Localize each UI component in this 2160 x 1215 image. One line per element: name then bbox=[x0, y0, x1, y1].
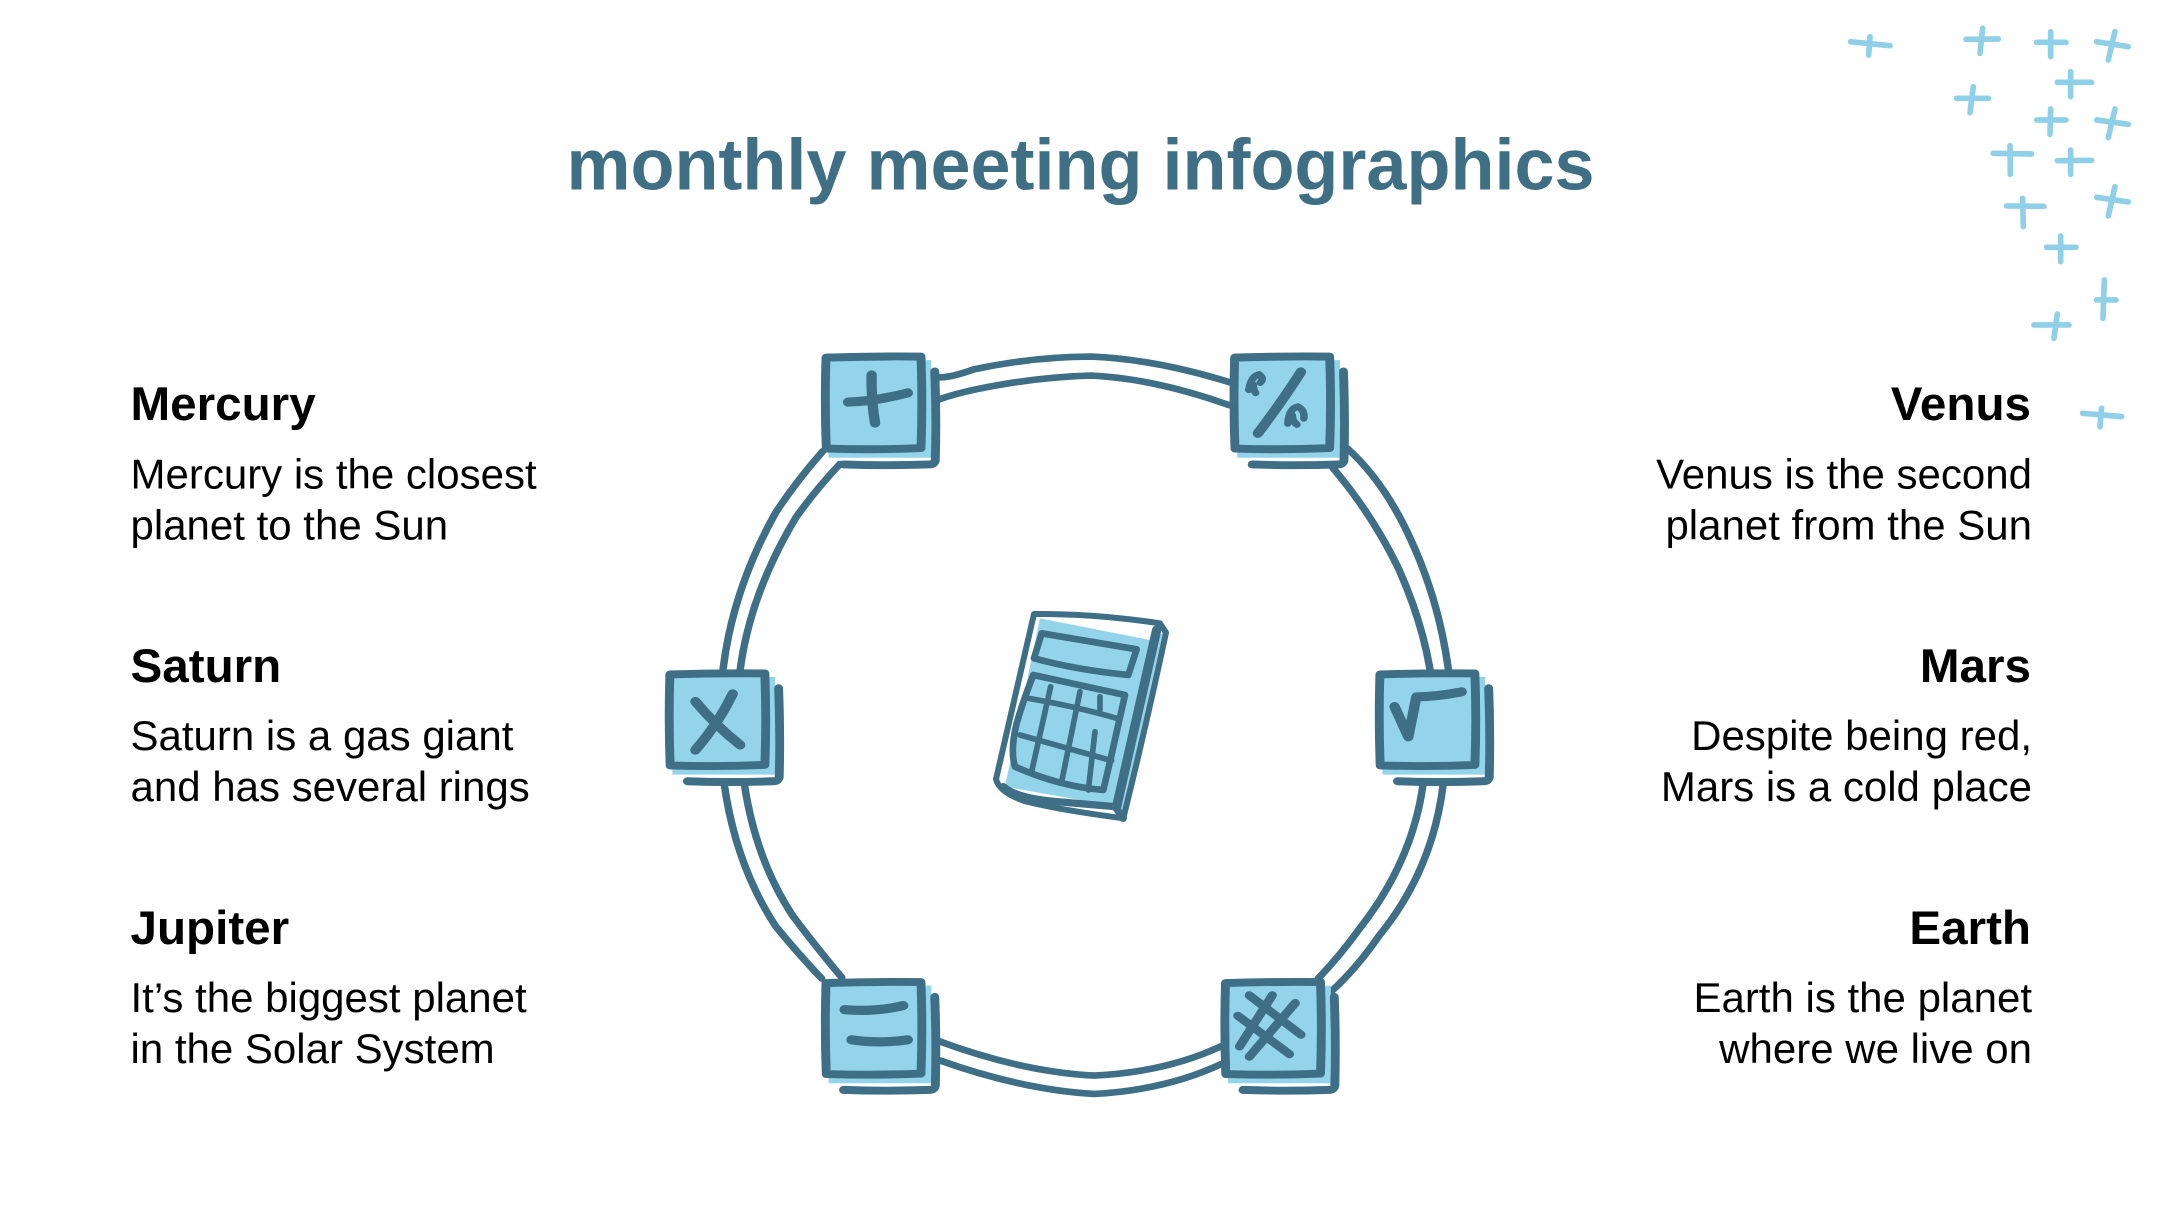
text block: Jupiter bbox=[130, 902, 527, 1072]
icon: calculator bbox=[996, 614, 1166, 818]
text block: Saturn: Saturn bbox=[130, 640, 281, 693]
text block: Jupiter: in the Solar System bbox=[130, 1025, 495, 1072]
text block: Saturn bbox=[130, 640, 530, 810]
text block: Venus: Venus is the second bbox=[1656, 450, 2032, 498]
icon: plus bbox=[825, 356, 936, 465]
text block: Mercury: Mercury bbox=[130, 378, 316, 431]
double ring bbox=[723, 357, 1448, 1094]
decorative plus marks bbox=[1851, 28, 2128, 427]
text block: Saturn: and has several rings bbox=[130, 763, 530, 810]
text block: Saturn: Saturn is a gas giant bbox=[130, 712, 514, 759]
text block: Venus bbox=[1656, 378, 2032, 548]
diagram: ring of operators bbox=[669, 356, 1490, 1094]
text block: Earth: Earth bbox=[1909, 902, 2031, 955]
text block: Earth bbox=[1693, 902, 2032, 1072]
text block: Earth: Earth is the planet bbox=[1693, 974, 2032, 1021]
text block: Earth: where we live on bbox=[1718, 1025, 2032, 1072]
text block: Mercury bbox=[130, 378, 537, 548]
title: monthly meeting infographics bbox=[566, 126, 1595, 206]
text block: Mars: Despite being red, bbox=[1691, 712, 2032, 759]
text block: Venus: Venus bbox=[1891, 378, 2031, 431]
text block: Mars: Mars bbox=[1920, 640, 2031, 693]
icon: percent bbox=[1234, 356, 1344, 465]
text block: Mercury: planet to the Sun bbox=[130, 502, 448, 548]
text block: Jupiter: It’s the biggest planet bbox=[130, 974, 527, 1021]
text block: Venus: planet from the Sun bbox=[1665, 502, 2032, 548]
text block: Mars bbox=[1661, 640, 2032, 810]
text block: Mercury: Mercury is the closest bbox=[130, 450, 537, 498]
text block: Jupiter: Jupiter bbox=[130, 902, 289, 955]
icon: equals bbox=[825, 982, 936, 1091]
icon: multiply bbox=[669, 673, 780, 782]
icon: hash bbox=[1225, 982, 1335, 1091]
text block: Mars: Mars is a cold place bbox=[1661, 763, 2032, 810]
icon: square root bbox=[1379, 673, 1490, 782]
